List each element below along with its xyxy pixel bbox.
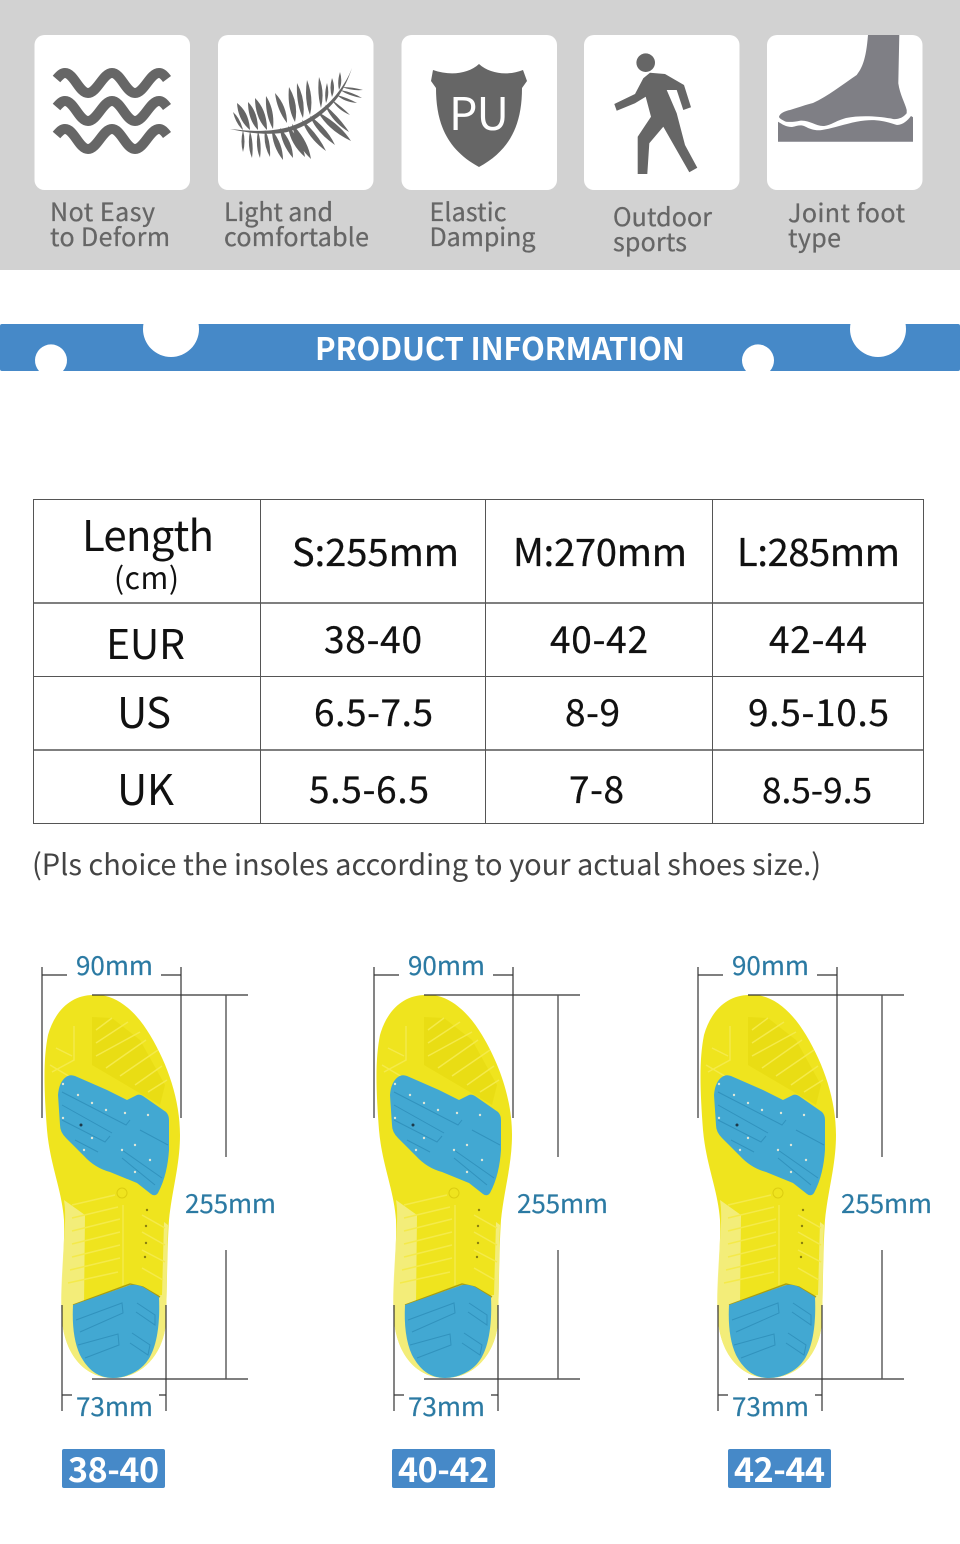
- insole diagram: 40-42: 73mm: [408, 1387, 485, 1424]
- size table: 5.5-6.5: [309, 760, 429, 814]
- label: light and comfortable: [224, 193, 369, 254]
- label: outdoor sports: Outdoor: [613, 198, 712, 234]
- size badge: 42-44: 42-44: [734, 1443, 825, 1492]
- label: joint foot type: Joint foot: [788, 194, 906, 230]
- insole diagram: 38-40: [42, 946, 276, 1424]
- size table: 42-44: [769, 610, 867, 664]
- insole diagram: 40-42: 90mm: [408, 946, 485, 983]
- size table: 40-42: [550, 610, 648, 664]
- size table: L:285mm: [737, 522, 900, 577]
- size table: 8-9: [565, 683, 620, 737]
- icon: walking person: [614, 53, 697, 174]
- heading band: product information: [0, 301, 960, 371]
- insole diagram: 38-40: 73mm: [76, 1387, 153, 1424]
- label: elastic damping: [430, 193, 536, 254]
- label: not easy to deform: Not Easy: [50, 193, 155, 229]
- icon: waves: [56, 73, 167, 149]
- panel: features background: [0, 0, 960, 270]
- insole diagram: 38-40: 90mm: [76, 946, 153, 983]
- feature: outdoor sports: [584, 35, 740, 259]
- icon: PU shield: [431, 64, 527, 167]
- feature: not easy to deform: [34, 35, 190, 254]
- label: not easy to deform: [50, 193, 170, 254]
- label: not easy to deform: to Deform: [50, 218, 170, 254]
- label: joint foot type: [788, 194, 906, 255]
- size table: Length: [82, 503, 214, 564]
- size table: 7-8: [569, 760, 624, 814]
- size table: (cm): [114, 554, 179, 598]
- icon: leaf: [230, 68, 363, 160]
- insole diagram: 42-44: 255mm: [841, 1184, 932, 1221]
- size table: [34, 500, 924, 824]
- size badge: 38-40: 38-40: [68, 1443, 159, 1492]
- size table: 6.5-7.5: [314, 683, 433, 737]
- insole diagram: 38-40: 255mm: [185, 1184, 276, 1221]
- size table: UK: [117, 757, 174, 818]
- size badge: 40-42: 40-42: [398, 1443, 489, 1492]
- insole diagram: 40-42: [374, 946, 608, 1424]
- insole diagram: 42-44: 73mm: [732, 1387, 809, 1424]
- insole diagram: 42-44: 90mm: [732, 946, 809, 983]
- feature: joint foot type: [767, 35, 922, 255]
- insole diagram: 40-42: 255mm: [517, 1184, 608, 1221]
- icon: PU shield: PU: [449, 78, 509, 143]
- label: elastic damping: Elastic: [430, 193, 507, 229]
- label: light and comfortable: comfortable: [224, 218, 369, 254]
- size table: EUR: [106, 611, 185, 671]
- note: size advice: (Pls choice the insoles according to your actual shoes size.): [32, 842, 821, 884]
- size table: 8.5-9.5: [762, 763, 872, 814]
- icon: foot on sole: [778, 35, 913, 142]
- label: joint foot type: type: [788, 219, 841, 255]
- size table: US: [117, 680, 171, 741]
- insole diagram: 42-44: [698, 946, 932, 1424]
- label: outdoor sports: [613, 198, 712, 259]
- feature: light and comfortable: [218, 35, 374, 254]
- feature: elastic damping: [402, 35, 557, 254]
- label: elastic damping: Damping: [430, 218, 536, 254]
- size table: M:270mm: [513, 522, 687, 577]
- heading band: product information: PRODUCT INFORMATION: [315, 324, 685, 369]
- label: light and comfortable: Light and: [224, 193, 333, 229]
- size table: S:255mm: [292, 522, 459, 577]
- size table: 9.5-10.5: [748, 683, 889, 737]
- label: outdoor sports: sports: [613, 223, 687, 259]
- size table: 38-40: [324, 610, 422, 664]
